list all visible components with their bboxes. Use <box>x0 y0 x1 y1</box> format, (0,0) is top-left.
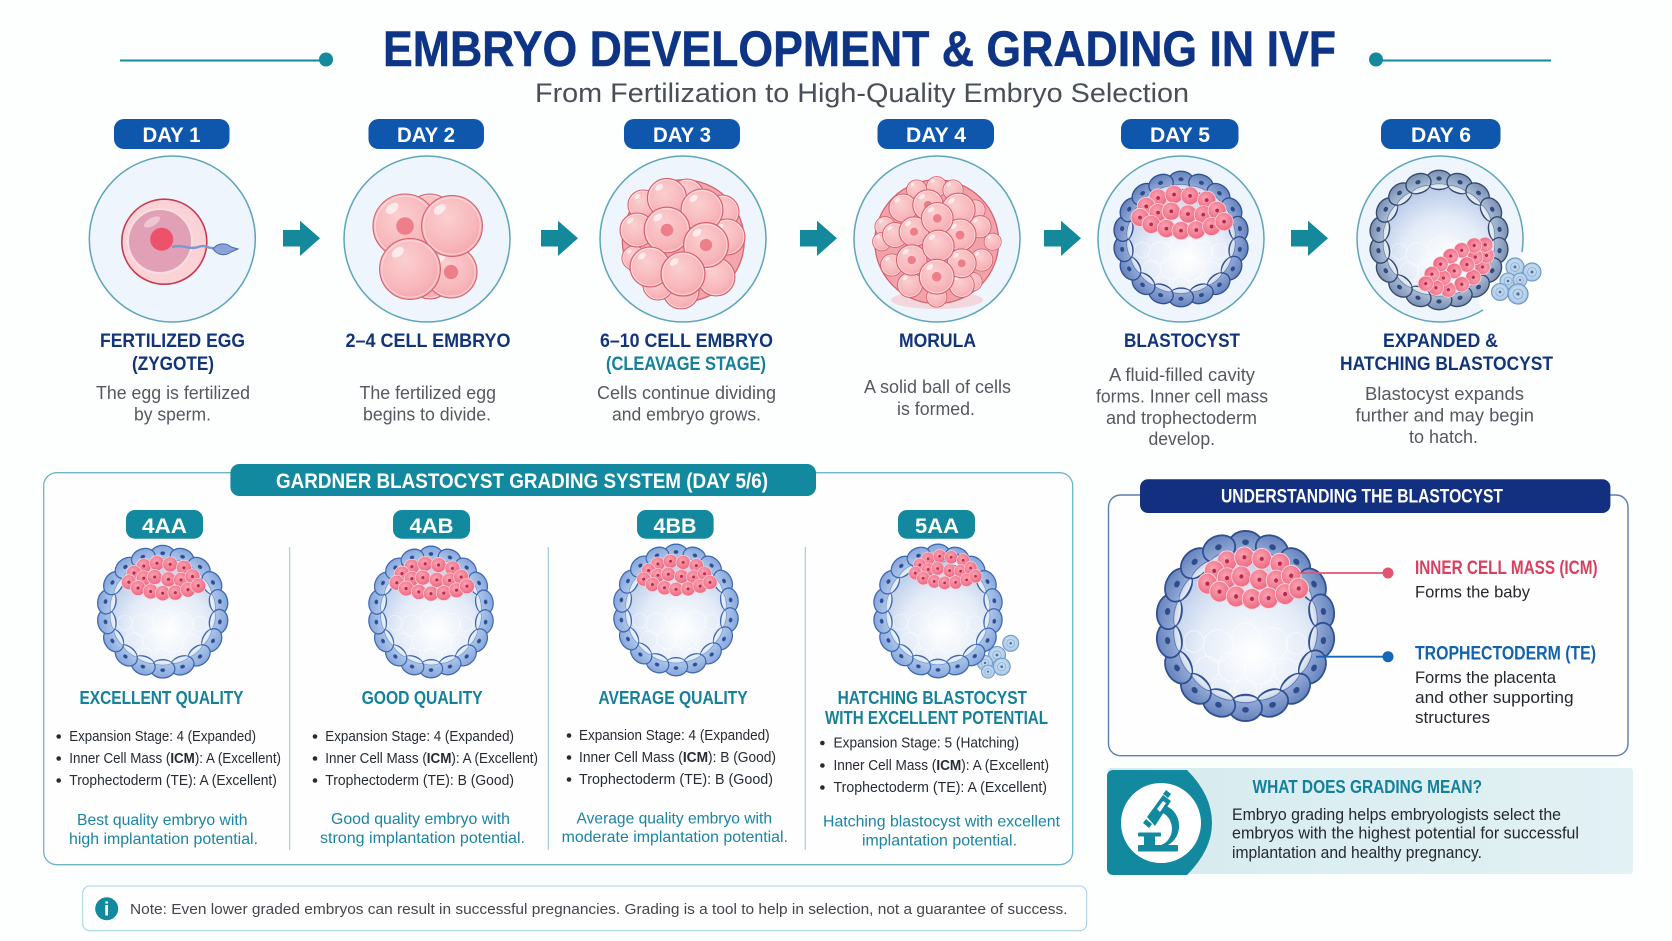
quality label: GOOD QUALITY <box>362 688 483 708</box>
quality label: AVERAGE QUALITY <box>598 688 748 708</box>
blastocyst 5AA <box>872 544 1004 678</box>
description: and embryo grows. <box>612 404 761 424</box>
grade badge 4AA <box>126 510 203 539</box>
description: A fluid-filled cavity <box>1109 365 1255 385</box>
callout: TE: structures <box>1415 709 1490 727</box>
summary: Best quality embryo with <box>77 812 248 829</box>
icon: info: i <box>104 900 109 920</box>
description: and trophectoderm <box>1106 408 1257 428</box>
description: is formed. <box>897 399 975 419</box>
description: to hatch. <box>1409 427 1478 447</box>
criteria list: Trophectoderm (TE): B (Good) <box>579 772 773 788</box>
grade badge 4BB <box>637 510 714 539</box>
summary: Average quality embryo with <box>576 810 772 828</box>
description <box>1096 365 1268 449</box>
stage name line 2: HATCHING BLASTOCYST <box>1340 353 1553 375</box>
criteria list: Inner Cell Mass (ICM): B (Good) <box>579 750 776 766</box>
description: begins to divide. <box>363 404 491 424</box>
arrow <box>1044 221 1081 256</box>
panel: what does grading mean <box>1107 768 1633 875</box>
illustration: zygote with sperm <box>89 156 255 322</box>
description <box>1356 384 1534 447</box>
summary: moderate implantation potential. <box>562 829 788 846</box>
heading: WHAT DOES GRADING MEAN? <box>1252 776 1482 797</box>
day 1 badge: DAY 1 <box>142 124 201 147</box>
arrow <box>800 221 837 256</box>
illustration: morula <box>854 156 1020 322</box>
illustration: hatching blastocyst <box>1357 156 1546 325</box>
blastocyst 4BB <box>612 544 740 676</box>
icon: info <box>95 897 118 920</box>
panel heading: GARDNER BLASTOCYST GRADING SYSTEM (DAY 5/6) <box>276 470 768 493</box>
callout: ICM: INNER CELL MASS (ICM) <box>1415 558 1598 579</box>
day 5 badge <box>1121 119 1238 149</box>
summary: implantation potential. <box>862 832 1017 850</box>
stage name: EXPANDED & <box>1383 330 1498 352</box>
body text: Embryo grading helps embryologists select the <box>1232 806 1561 824</box>
panel: understanding the blastocyst <box>1108 479 1628 756</box>
column: 5AA <box>820 510 1061 850</box>
day 3 badge <box>624 119 740 149</box>
callout line: ICM <box>1300 568 1394 578</box>
criteria list: Trophectoderm (TE): B (Good) <box>325 773 514 789</box>
panel heading: UNDERSTANDING THE BLASTOCYST <box>1221 486 1503 508</box>
blastocyst 4AA <box>96 545 230 678</box>
day 6 badge <box>1381 119 1500 149</box>
grade badge 5AA: 5AA <box>915 515 959 538</box>
stage name: BLASTOCYST <box>1124 330 1240 352</box>
column: 4AA <box>56 510 281 848</box>
description <box>597 383 776 424</box>
stage: day 5 <box>1096 119 1268 449</box>
day 2 badge <box>368 119 484 149</box>
callout: TE: TROPHECTODERM (TE) <box>1415 643 1596 664</box>
criteria list <box>56 729 281 789</box>
day 6 badge: DAY 6 <box>1411 124 1471 147</box>
summary <box>823 814 1061 850</box>
description: Blastocyst expands <box>1365 384 1524 404</box>
subtitle: From Fertilization to High-Quality Embryo Selection <box>535 78 1189 108</box>
stage: day 3 <box>597 119 776 424</box>
criteria list: Expansion Stage: 4 (Expanded) <box>579 728 770 744</box>
day 5 badge: DAY 5 <box>1150 124 1210 147</box>
grade badge 5AA <box>898 510 975 539</box>
day 3 badge: DAY 3 <box>653 124 711 147</box>
title: EMBRYO DEVELOPMENT & GRADING IN IVF <box>383 21 1336 77</box>
arrow <box>1291 221 1328 256</box>
summary <box>320 811 525 847</box>
description: Cells continue dividing <box>597 383 776 403</box>
note text: Note: Even lower graded embryos can result in successful pregnancies. Grading is a tool to help in selection, not a guarantee of success. <box>130 901 1068 918</box>
criteria list: Trophectoderm (TE): A (Excellent) <box>69 773 277 789</box>
stage: day 4 <box>854 119 1020 419</box>
stage name: FERTILIZED EGG <box>100 330 245 352</box>
stage name line 2: (ZYGOTE) <box>132 353 214 375</box>
day 2 badge: DAY 2 <box>397 124 455 147</box>
body text: embryos with the highest potential for successful <box>1232 824 1579 842</box>
criteria list: Expansion Stage: 4 (Expanded) <box>325 729 514 745</box>
icon: microscope <box>1107 770 1212 875</box>
day 4 badge <box>878 119 994 149</box>
criteria list: Expansion Stage: 4 (Expanded) <box>69 729 256 745</box>
callout: ICM: Forms the baby <box>1415 584 1531 602</box>
quality label <box>825 688 1048 728</box>
title ornament left <box>120 52 333 66</box>
summary <box>562 810 788 846</box>
callout line: TE <box>1316 651 1394 662</box>
callout: TE <box>1415 643 1596 727</box>
criteria list: Inner Cell Mass (ICM): A (Excellent) <box>69 751 281 767</box>
illustration: 2-4 cell embryo <box>344 156 510 322</box>
grade badge 4AB <box>393 510 470 539</box>
description: forms. Inner cell mass <box>1096 386 1268 406</box>
body text: implantation and healthy pregnancy. <box>1232 844 1482 862</box>
grade badge 4AA: 4AA <box>142 515 187 538</box>
hatching cells <box>971 635 1019 678</box>
illustration: 6-10 cell embryo <box>600 156 766 322</box>
stage name: 6–10 CELL EMBRYO <box>600 330 773 352</box>
criteria list <box>313 729 538 789</box>
callout: TE: and other supporting <box>1415 689 1574 707</box>
criteria list <box>820 736 1049 796</box>
note box <box>83 886 1087 931</box>
grade badge 4BB: 4BB <box>654 515 696 538</box>
panel: Gardner grading system <box>44 464 1073 865</box>
day 1 badge <box>114 119 230 149</box>
column: 4AB <box>313 510 538 847</box>
arrow <box>541 221 578 256</box>
quality label: EXCELLENT QUALITY <box>80 688 244 708</box>
blastocyst 4AB <box>367 546 495 678</box>
summary <box>69 812 258 848</box>
blastocyst diagram <box>1154 531 1337 721</box>
description: by sperm. <box>134 404 211 424</box>
criteria list: Inner Cell Mass (ICM): A (Excellent) <box>325 751 538 767</box>
description: The fertilized egg <box>360 383 496 403</box>
illustration: blastocyst <box>1098 156 1264 322</box>
description: develop. <box>1148 429 1215 449</box>
arrow <box>283 221 320 256</box>
title ornament right <box>1369 52 1551 66</box>
description <box>864 377 1011 419</box>
summary: Good quality embryo with <box>331 811 510 828</box>
stage name line 2: (CLEAVAGE STAGE) <box>606 353 766 375</box>
description: The egg is fertilized <box>96 383 250 403</box>
criteria list <box>567 728 776 788</box>
quality label: HATCHING BLASTOCYST <box>838 688 1027 708</box>
stage: day 6 <box>1340 119 1553 447</box>
callout: ICM <box>1415 558 1598 602</box>
criteria list: Inner Cell Mass (ICM): A (Excellent) <box>834 758 1049 774</box>
grade badge 4AB: 4AB <box>410 515 454 538</box>
description: A solid ball of cells <box>864 377 1011 397</box>
stage: day 1 <box>89 119 255 424</box>
criteria list: Trophectoderm (TE): A (Excellent) <box>834 780 1047 796</box>
summary: Hatching blastocyst with excellent <box>823 814 1061 830</box>
day 4 badge: DAY 4 <box>906 124 966 147</box>
panel heading <box>230 464 816 496</box>
stage name: MORULA <box>899 330 976 352</box>
stage: day 2 <box>344 119 510 424</box>
stage name: 2–4 CELL EMBRYO <box>346 330 510 352</box>
callout: TE: Forms the placenta <box>1415 669 1557 687</box>
body text <box>1232 806 1579 862</box>
column: 4BB <box>562 510 788 846</box>
description <box>360 383 496 424</box>
description: further and may begin <box>1356 406 1534 426</box>
panel heading <box>1140 479 1610 513</box>
summary: strong implantation potential. <box>320 830 525 847</box>
summary: high implantation potential. <box>69 831 258 848</box>
criteria list: Expansion Stage: 5 (Hatching) <box>834 736 1019 752</box>
quality label: WITH EXCELLENT POTENTIAL <box>825 708 1048 728</box>
description <box>96 383 250 424</box>
